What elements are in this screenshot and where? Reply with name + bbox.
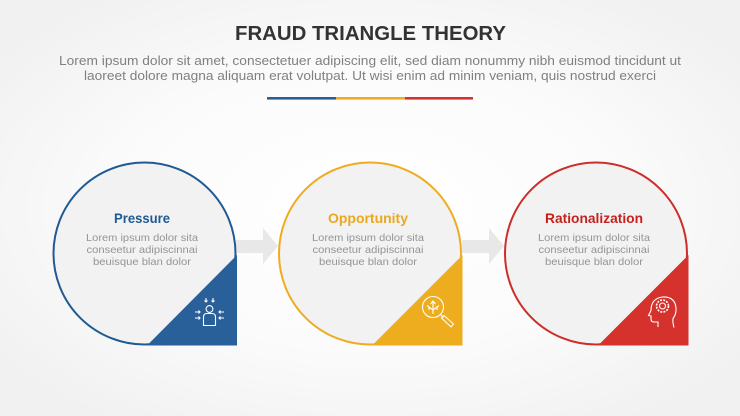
body text: opportunity: [312, 232, 424, 268]
circle outline: [505, 162, 687, 344]
body text: pressure: Lorem ipsum dolor sita: [86, 232, 198, 244]
circle outline: [54, 162, 236, 344]
icon: head with gear: [648, 297, 676, 328]
circle outline: [279, 162, 461, 344]
tri-colour divider: [267, 97, 473, 100]
icon: magnifier with arrows: [422, 296, 454, 327]
body text: pressure: conseetur adipiscinnai: [86, 244, 198, 256]
body text: pressure: [86, 232, 198, 268]
arrow: pressure to opportunity: [236, 228, 278, 264]
panel: pressure: [54, 162, 237, 346]
body text: opportunity: beuisque blan dolor: [319, 256, 418, 268]
corner triangle: [372, 255, 462, 346]
icon: person under pressure: [195, 298, 224, 326]
body text: opportunity: Lorem ipsum dolor sita: [312, 232, 424, 244]
heading: pressure: Pressure: [114, 210, 170, 226]
body text: rationalization: [538, 232, 650, 268]
body text: rationalization: Lorem ipsum dolor sita: [538, 232, 650, 244]
subtitle text: laoreet dolore magna aliquam erat volutpat. Ut wisi enim ad minim veniam, quis nostrud exerci: [84, 68, 656, 83]
panel: opportunity: [279, 162, 462, 346]
corner triangle: [147, 255, 237, 346]
title: FRAUD TRIANGLE THEORY: [235, 22, 506, 45]
heading: opportunity: Opportunity: [328, 210, 408, 226]
subtitle text: [59, 53, 681, 83]
arrow: opportunity to rationalization: [462, 228, 504, 264]
body text: pressure: beuisque blan dolor: [93, 256, 192, 268]
heading: rationalization: Rationalization: [545, 210, 643, 226]
body text: rationalization: beuisque blan dolor: [545, 256, 644, 268]
corner triangle: [598, 255, 688, 346]
body text: opportunity: conseetur adipiscinnai: [312, 244, 424, 256]
subtitle text: Lorem ipsum dolor sit amet, consectetuer adipiscing elit, sed diam nonummy nibh euismod tincidunt ut: [59, 53, 681, 68]
panel: rationalization: [505, 162, 688, 346]
body text: rationalization: conseetur adipiscinnai: [538, 244, 650, 256]
